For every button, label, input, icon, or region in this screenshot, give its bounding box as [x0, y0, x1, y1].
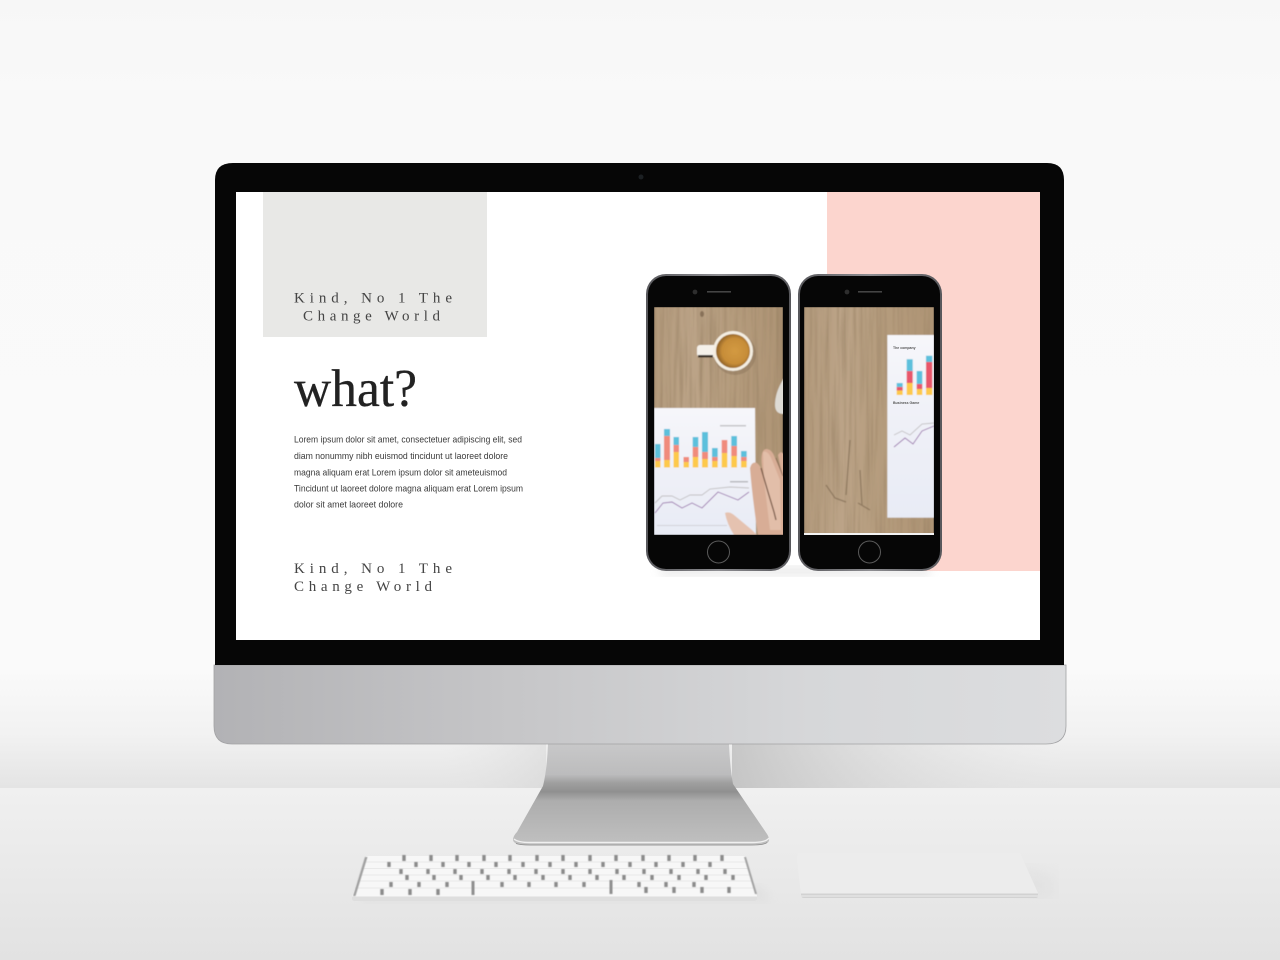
phone right	[798, 274, 942, 571]
monitor shadow on wall	[440, 744, 1066, 788]
text: box title: Change World	[303, 308, 440, 324]
mouse	[775, 378, 784, 414]
keyboard key gaps	[382, 855, 733, 895]
text: body paragraph: diam nonummy nibh euismod tincidunt ut laoreet dolore	[294, 451, 508, 461]
monitor	[214, 163, 1066, 744]
monitor chin	[214, 665, 1066, 744]
paper with charts	[654, 408, 756, 535]
finger highlight	[763, 452, 781, 530]
monitor stand	[513, 744, 769, 846]
phone right screen: photo of wood and chart paper	[804, 307, 934, 535]
keyboard row lines	[355, 862, 755, 888]
text: box title: Kind, No 1 The	[294, 290, 452, 306]
wood knot	[700, 311, 704, 317]
text: body paragraph: magna aliquam erat Lorem ipsum dolor sit ameteuismod	[294, 467, 507, 477]
line chart	[655, 487, 749, 513]
wood knots	[826, 440, 870, 510]
thumb	[725, 512, 757, 535]
keyboard edges	[353, 857, 757, 896]
chart label: The company	[893, 346, 916, 350]
background: desk	[0, 788, 1280, 960]
palm and outer fingers	[750, 449, 784, 535]
panel: pink block	[827, 192, 1040, 571]
text: body paragraph	[294, 434, 523, 510]
chart label: Business Game	[893, 401, 919, 405]
text: bottom tagline	[294, 561, 452, 595]
bar chart	[655, 429, 747, 468]
panel: grey title box	[263, 192, 487, 337]
monitor screen	[236, 192, 1040, 640]
heading: what?: what?	[294, 360, 417, 418]
text: box title	[294, 290, 452, 324]
phone left	[646, 274, 791, 571]
trackpad	[797, 853, 1055, 898]
text: bottom tagline: Kind, No 1 The	[294, 561, 452, 577]
text: body paragraph: Tincidunt ut laoreet dolore magna aliquam erat Lorem ipsum	[294, 484, 523, 494]
bar chart	[897, 356, 932, 395]
text: body paragraph: dolor sit amet laoreet dolore	[294, 500, 403, 510]
keyboard	[352, 855, 772, 902]
finger gap	[761, 468, 776, 520]
coffee cup	[697, 331, 756, 375]
keyboard body	[352, 856, 757, 901]
panel: slide content	[263, 192, 1040, 595]
webcam	[638, 174, 644, 180]
text: body paragraph: Lorem ipsum dolor sit amet, consectetuer adipiscing elit, sed	[294, 434, 522, 444]
paper with charts	[887, 335, 934, 518]
monitor bezel	[215, 163, 1064, 665]
hand	[725, 449, 784, 535]
phone shadow	[660, 566, 930, 576]
text: bottom tagline: Change World	[294, 579, 432, 595]
phone left screen: photo of coffee and charts	[654, 307, 784, 535]
keyboard spacebar gaps	[473, 880, 611, 895]
line chart	[894, 423, 934, 447]
